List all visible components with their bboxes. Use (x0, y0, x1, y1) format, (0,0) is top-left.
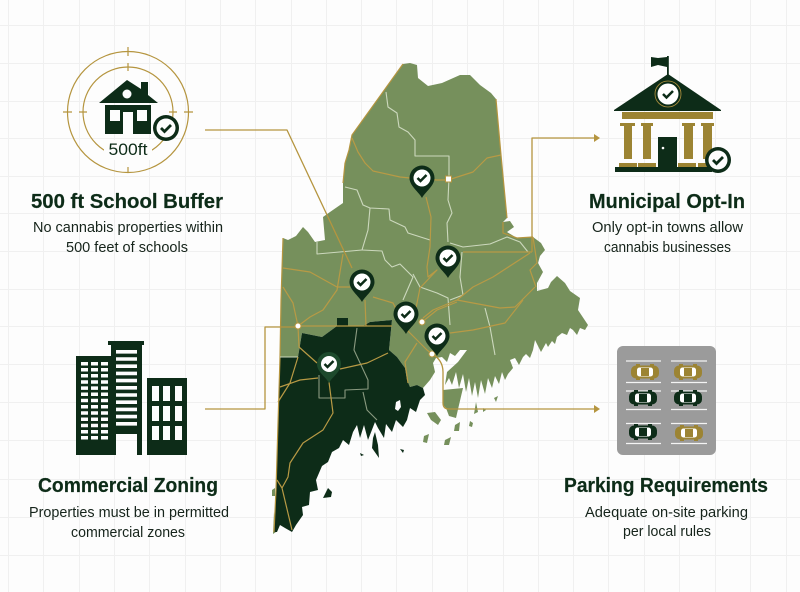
heading: 500 ft School Buffer (31, 191, 223, 213)
connector: municipal opt-in arrow (532, 134, 600, 252)
door (658, 137, 677, 167)
columns and entablature (619, 112, 714, 167)
icon: commercial buildings (76, 341, 187, 455)
text block: school buffer (31, 191, 223, 256)
region: coastal islets (310, 432, 404, 498)
roof (614, 74, 721, 111)
right block windows (152, 386, 182, 440)
description line 2: commercial zones (71, 525, 185, 541)
county lines (280, 92, 528, 420)
map pin 1 (410, 166, 434, 198)
icon: municipal building (614, 56, 731, 173)
description: Only opt-in towns allow (592, 220, 744, 236)
car: dark (629, 390, 657, 406)
map pin 2 (436, 246, 460, 278)
base (615, 167, 712, 172)
icon: school buffer house (63, 47, 193, 172)
heading: Parking Requirements (564, 475, 768, 497)
right block (147, 378, 187, 455)
map pin 5 (424, 324, 450, 356)
tower windows (116, 350, 137, 426)
left block windows (81, 362, 108, 440)
region: islands and peninsulas (272, 388, 498, 534)
description: No cannabis properties within (33, 220, 223, 236)
map pin 4 (394, 302, 418, 334)
map: Maine (272, 63, 588, 534)
car: dark (629, 424, 657, 440)
parking lines (626, 361, 707, 444)
car: gold (674, 364, 702, 380)
car: gold (675, 425, 703, 441)
connector: commercial zoning to map (205, 327, 298, 409)
roads (277, 138, 537, 530)
check badge (153, 115, 179, 141)
text block: parking requirements (564, 475, 768, 540)
region: southern commercial counties (274, 318, 425, 532)
car: gold (631, 364, 659, 380)
description line 2: per local rules (623, 524, 711, 540)
connector: parking arrow (432, 354, 600, 413)
tower (76, 341, 144, 455)
description line 2: cannabis businesses (604, 240, 731, 256)
text block: municipal opt-in (589, 191, 745, 256)
roof badge (655, 81, 681, 107)
map pin 3 (350, 270, 374, 302)
description line 2: 500 feet of schools (66, 240, 188, 256)
distance label: 500ft (108, 140, 148, 159)
text block: commercial zoning (29, 475, 229, 541)
car: dark (674, 390, 702, 406)
house (99, 80, 158, 103)
flag (651, 57, 667, 67)
check badge (705, 147, 731, 173)
description: Properties must be in permitted (29, 505, 229, 521)
connector: school buffer to map (205, 130, 352, 268)
region: eligible northern counties (280, 63, 588, 398)
heading: Commercial Zoning (38, 475, 218, 497)
buffer rings (63, 47, 193, 172)
map pin 6 (317, 352, 341, 383)
description: Adequate on-site parking (585, 505, 748, 521)
state border (274, 64, 533, 532)
junction markers (295, 176, 452, 357)
heading: Municipal Opt-In (589, 191, 745, 213)
icon: parking lot (617, 346, 716, 455)
inlet (395, 400, 401, 411)
